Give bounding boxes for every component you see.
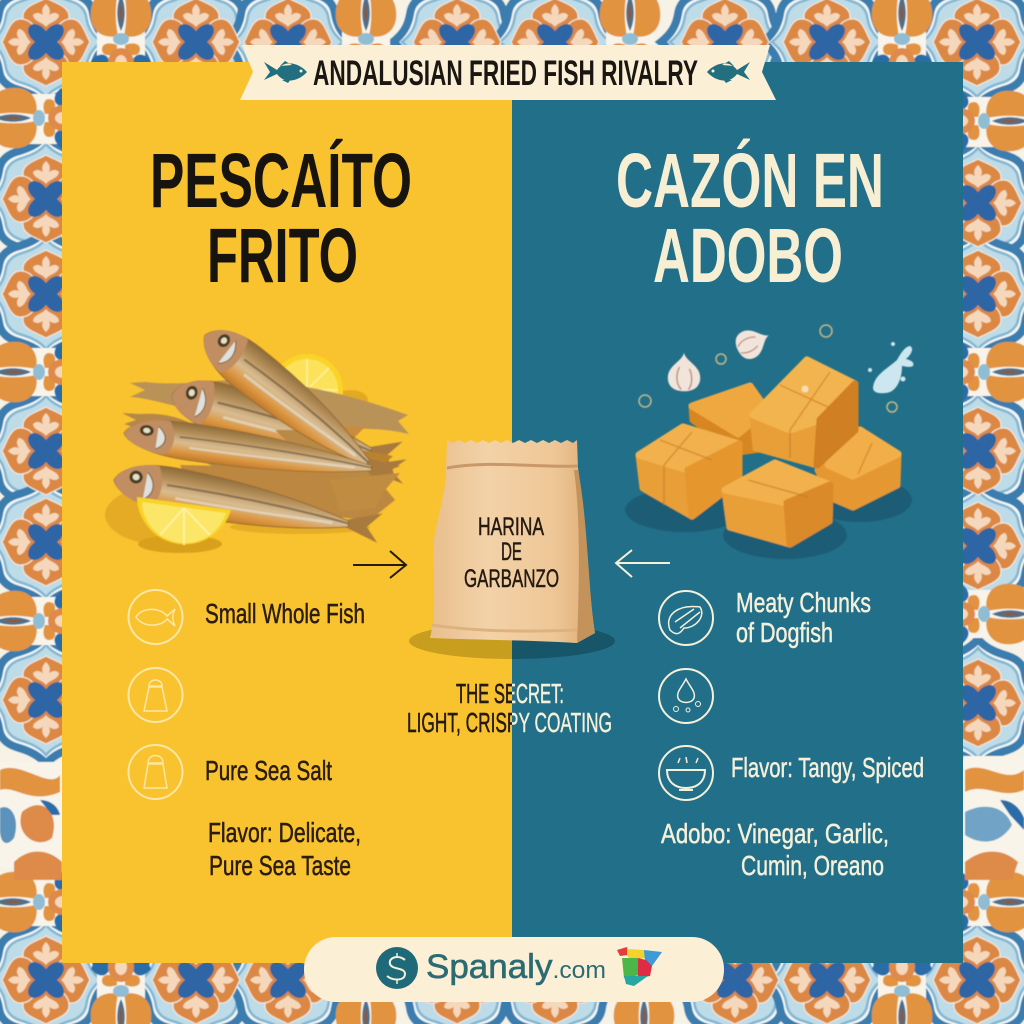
text: left column labels: Pure Sea Taste [209,850,351,881]
text: left column labels: Pure Sea Salt [205,755,332,786]
heading: cazon en adobo: ADOBO [653,213,843,299]
bag label [464,513,559,593]
text: right column labels: Meaty Chunks [736,587,871,618]
panel: pescaito frito [62,62,512,963]
bag label: GARBANZO [464,565,559,593]
text: left column labels: Flavor: Delicate, [208,817,361,848]
text: left column labels: Small Whole Fish [205,598,365,629]
icon: spanaly logo [376,947,418,989]
text: right column labels [661,587,924,881]
cube: left front [639,427,739,516]
text: right column labels: of Dogfish [736,617,833,648]
title ribbon [240,45,776,100]
cube: right [818,430,898,507]
text: right column labels: Flavor: Tangy, Spiced [731,752,924,783]
footer brand pill [304,937,724,1002]
icon: vinegar splash [868,342,913,393]
text: right column labels: Adobo: Vinegar, Garlic, [661,818,889,849]
lemon wedge front [137,497,231,545]
caption: the secret [407,678,612,738]
cube: back left [692,386,767,452]
bag label: DE [501,538,522,566]
panel: cazon en adobo [512,62,963,963]
heading: pescaito frito [150,138,412,299]
text: left column labels [205,598,365,881]
icon: left fish [264,61,307,83]
heading: cazon en adobo: CAZÓN EN [616,138,884,224]
caption: the secret: THE SECRET: [456,678,564,709]
cube: front [725,463,830,544]
text: right column labels: Cumin, Oreano [741,850,884,881]
brand name: Spanaly.com [426,948,606,986]
illustration: fried fish pile [105,316,409,553]
icon: right fish [707,61,750,83]
cube: top big [753,360,855,465]
spice dots [639,325,897,412]
icon: spain map [617,947,662,986]
heading: cazon en adobo [616,138,884,299]
icon: steaming bowl [659,746,713,800]
heading: pescaito frito: FRITO [207,213,358,299]
icon: small fish [128,590,182,644]
lemon slice back [271,354,343,426]
icon: garlic right [732,322,775,363]
icon: salt shaker [128,745,182,799]
illustration: adobo fried cubes [625,322,913,559]
icon: salt shaker with grains [128,668,182,722]
icon: fish steak [659,591,713,645]
icon: garlic left [668,353,700,391]
arrow: right-pointing [353,551,406,578]
caption: the secret: LIGHT, CRISPY COATING [407,707,612,738]
arrow: left-pointing [616,550,670,577]
heading: pescaito frito: PESCAÍTO [150,138,412,224]
title text: ANDALUSIAN FRIED FISH RIVALRY [313,54,698,93]
icon: garlic and spices [659,669,713,723]
illustration: flour bag [409,440,615,659]
bag label: HARINA [478,513,544,541]
